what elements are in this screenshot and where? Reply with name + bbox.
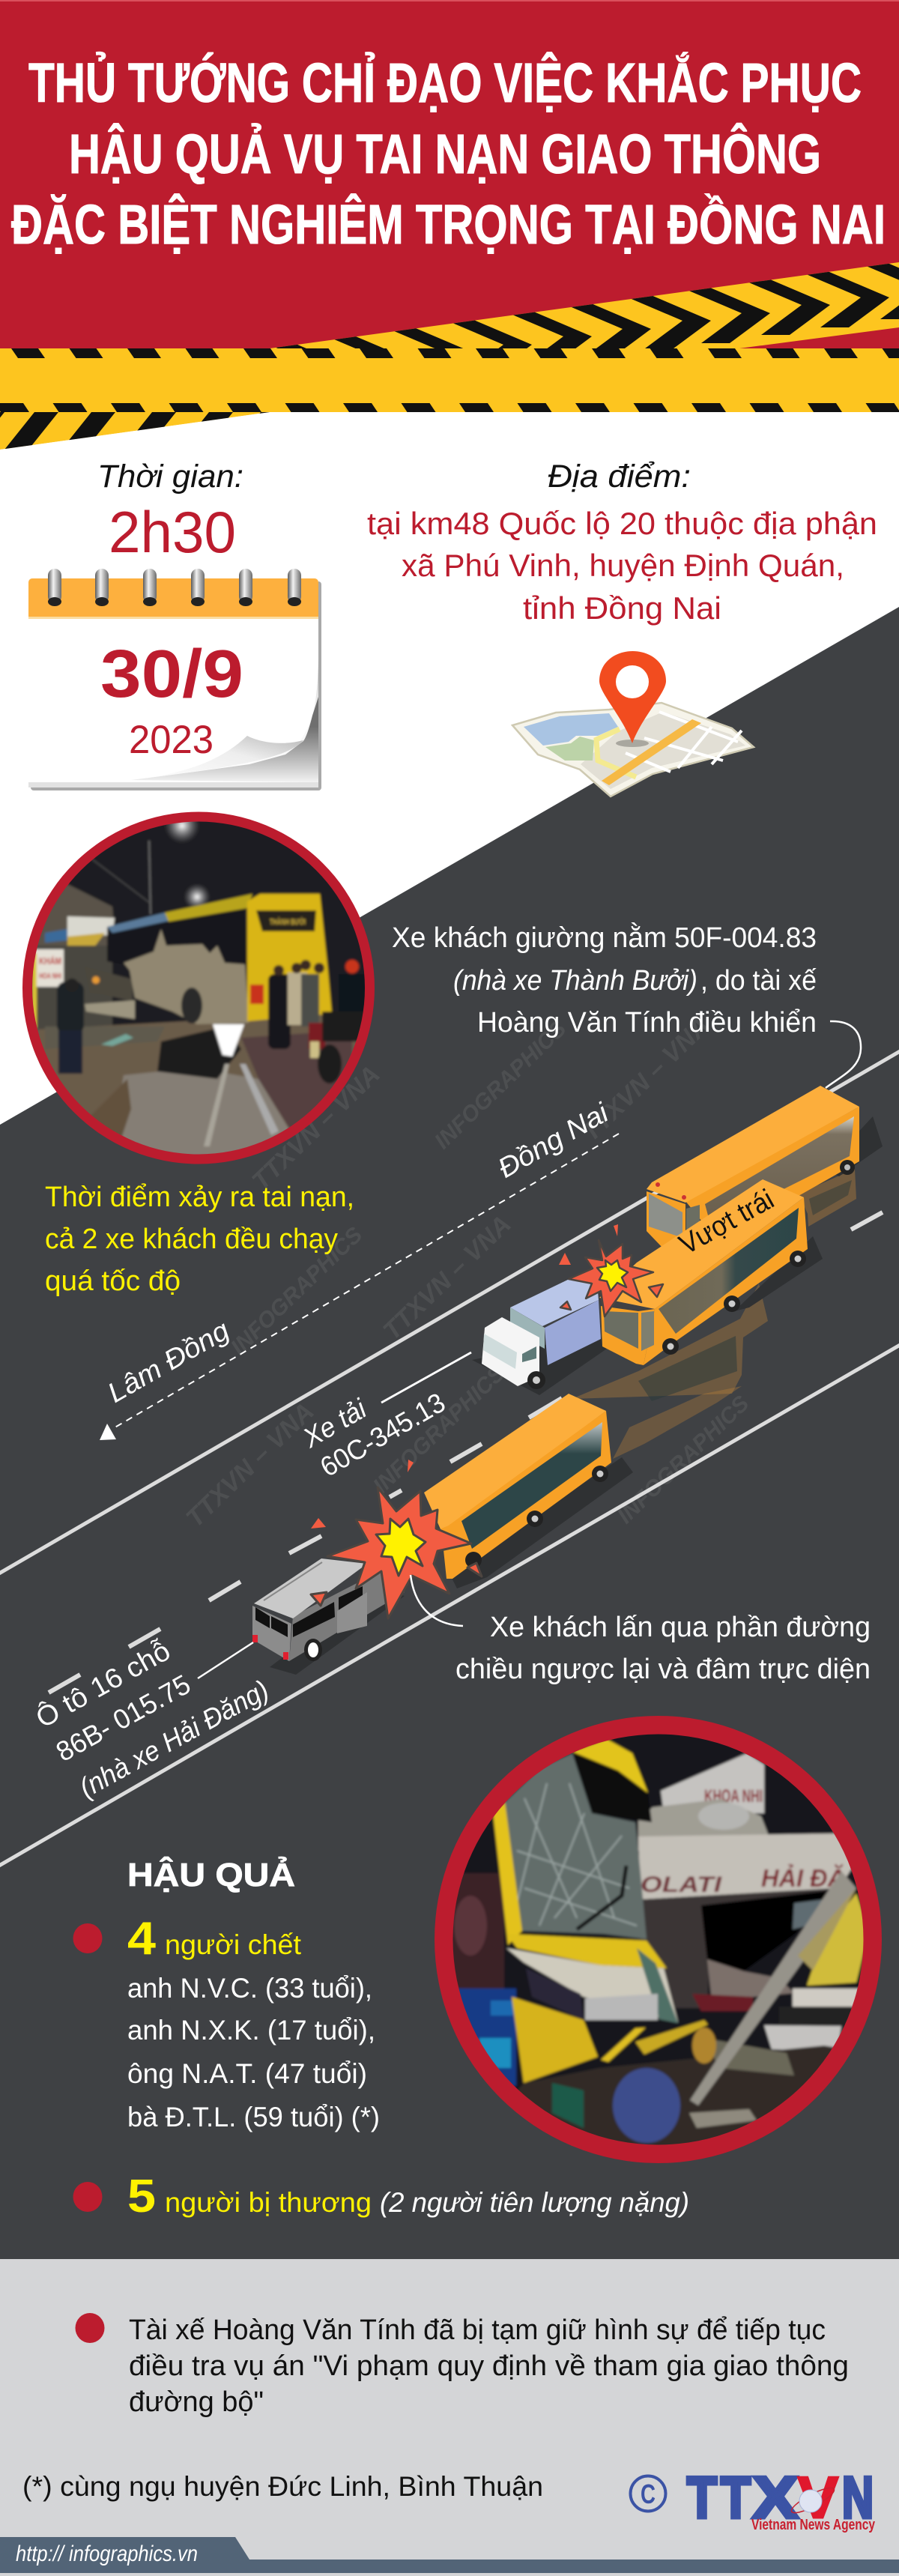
logo: TTXVN: N (842, 2464, 874, 2530)
heading: consequences: HẬU QUẢ (127, 1856, 295, 1893)
page-curl shadow (131, 697, 318, 782)
watermarks: TTXVN – VNA (378, 1210, 517, 1346)
bystanders (57, 982, 84, 1034)
label: truck plate: 60C-345.13 (315, 1387, 450, 1483)
callout: head-on collision (411, 1575, 871, 1685)
location block (367, 459, 877, 626)
illustration: overtaking bus (599, 1179, 823, 1365)
block: 4 deaths: 4 (127, 1913, 157, 1965)
logo: TTXVN: T (687, 2464, 717, 2530)
bent pole (690, 1871, 856, 2105)
illustration: front-colliding bus (424, 1394, 633, 1588)
block: 4 deaths: người chết (165, 1929, 302, 1960)
location block: tỉnh Đồng Nai (523, 590, 721, 626)
ground (37, 1013, 357, 1128)
street lamps (165, 821, 199, 842)
location block: xã Phú Vinh, huyện Định Quán, (402, 548, 844, 583)
block: driver detained: Tài xế Hoàng Văn Tính đã bị tạm giữ hình sự để tiếp tục (129, 2315, 826, 2346)
block: 4 deaths (73, 1913, 380, 2132)
callout: head-on collision: Xe khách lấn qua phần đường (490, 1612, 871, 1643)
label: 16-seat car: (nhà xe Hải Đăng) (74, 1674, 274, 1803)
block: driver detained: đường bộ" (129, 2386, 264, 2418)
callout: speeding (45, 1182, 354, 1297)
block: 4 deaths: anh N.V.C. (33 tuổi), (127, 1973, 372, 2004)
bus rear (247, 894, 332, 1021)
block: driver detained: điều tra vụ án "Vi phạm quy định về tham gia giao thông (129, 2350, 849, 2382)
bus side (106, 926, 118, 963)
photo: accident scene at night: KHÁM (39, 955, 61, 967)
block: 5 injured (73, 2171, 689, 2222)
background: grey footer panel (0, 2259, 899, 2576)
yellow tape band (0, 348, 899, 412)
callout: sleeper bus: , do tài xế (700, 965, 817, 997)
label: 16-seat car: Ô tô 16 chỗ (31, 1635, 175, 1734)
watermarks: INFOGRAPHICS (226, 1223, 367, 1360)
callout: sleeper bus: Xe khách giường nằm 50F-004.83 (392, 922, 817, 954)
block: driver detained (75, 2313, 849, 2418)
photo: accident scene at night: HOA NHI (39, 972, 61, 981)
block: 4 deaths: ông N.A.T. (47 tuổi) (127, 2058, 367, 2089)
icon: calendar: 30/9 (100, 637, 243, 712)
illustration: upper bus (647, 1086, 883, 1249)
logo: TTXVN: T (721, 2464, 751, 2530)
illustration: truck (472, 1266, 607, 1395)
label: Lâm Đồng: Lâm Đồng (102, 1314, 234, 1409)
callout: sleeper bus: (nhà xe Thành Bưởi) (453, 965, 697, 997)
watermarks: INFOGRAPHICS (613, 1391, 754, 1529)
label: 16-seat car (31, 1635, 274, 1803)
label: Đồng Nai: Đồng Nai (493, 1096, 614, 1184)
callout: sleeper bus: Hoàng Văn Tính điều khiển (477, 1007, 817, 1038)
watermarks: INFOGRAPHICS (369, 1361, 509, 1499)
title (11, 52, 886, 256)
block: 4 deaths: anh N.X.K. (17 tuổi), (127, 2015, 375, 2046)
block: 5 injured: người bị thương (165, 2187, 372, 2218)
bus front (572, 1739, 648, 1793)
pin (599, 651, 666, 743)
motorbike (309, 1023, 325, 1049)
logo: TTXVN: C (641, 2479, 656, 2509)
icon: explosion main (311, 1460, 482, 1618)
page curl (131, 736, 303, 780)
interior left (452, 1873, 504, 1993)
time block: 2h30 (109, 499, 236, 565)
photo: wreckage close-up: KHOA NHI (704, 1786, 763, 1806)
icon: calendar: 2023 (129, 718, 214, 762)
leader: truck (381, 1352, 471, 1403)
logo: TTXVN (631, 2464, 876, 2533)
ghost shadow of buses (572, 1169, 856, 1459)
label: Vượt trái: Vượt trái (674, 1184, 779, 1261)
location block: tại km48 Quốc lộ 20 thuộc địa phận (367, 506, 877, 541)
time block (97, 459, 243, 565)
road markings (0, 1047, 899, 1869)
shops left (37, 883, 115, 947)
gas cylinder (613, 2068, 680, 2143)
lower-left tape wedge (0, 412, 270, 450)
chevron warning tape (270, 262, 899, 348)
block: 4 deaths: bà Đ.T.L. (59 tuổi) (*) (127, 2102, 380, 2132)
watermarks: TTXVN – VNA (246, 1060, 386, 1196)
background: dark road diagonal area (0, 607, 899, 2260)
watermarks: INFOGRAPHICS (430, 1017, 571, 1154)
block: 5 injured: (2 người tiên lượng nặng) (380, 2187, 689, 2218)
callout: speeding: Thời điểm xảy ra tai nạn, (45, 1182, 354, 1213)
photo: accident scene at night (22, 808, 375, 1169)
footer strip with url (0, 2537, 899, 2573)
header: red banner with warning tape (0, 0, 899, 348)
block: 5 injured: 5 (127, 2171, 156, 2222)
leader line (826, 1021, 861, 1088)
ground rubble (517, 2044, 834, 2144)
watermarks (181, 1012, 754, 1533)
sign (661, 1753, 764, 1813)
icon: calendar (28, 569, 321, 790)
photo: accident scene at night: THÀNH BƯỞI (270, 917, 306, 927)
icon: explosion upper (559, 1224, 663, 1316)
photo: wreckage close-up: OLATI (641, 1872, 722, 1897)
logo: TTXVN: X (753, 2464, 798, 2530)
time block: Thời gian: (97, 459, 243, 495)
label: 16-seat car: 86B- 015.75 (51, 1669, 196, 1768)
label: truck plate: Xe tải (297, 1393, 372, 1454)
callout: head-on collision: chiều ngược lại và đâm trực diện (455, 1654, 871, 1685)
footer strip with url: http:// infographics.vn (16, 2542, 198, 2566)
direction line with arrow (100, 1134, 619, 1440)
crashed bus front (111, 973, 133, 1001)
location block: Địa điểm: (548, 459, 691, 495)
watermarks: TTXVN – VNA (181, 1397, 320, 1533)
callout: speeding: quá tốc độ (45, 1266, 181, 1297)
callout: sleeper bus (392, 922, 861, 1088)
photo: wreckage close-up (435, 1716, 882, 2163)
watermarks: TTXVN – VNA (576, 1012, 715, 1147)
icon: map with location pin (512, 651, 754, 796)
photo: wreckage close-up: HẢI ĐĂ (761, 1864, 845, 1892)
logo: TTXVN: V (798, 2464, 838, 2530)
illustration: grey minibus (252, 1558, 405, 1675)
footnote: (*) cùng ngụ huyện Đức Linh, Bình Thuận (22, 2471, 543, 2502)
callout: speeding: cả 2 xe khách đều chạy (45, 1224, 338, 1255)
silver minibus (638, 1799, 770, 1851)
leader: minibus (198, 1642, 253, 1678)
